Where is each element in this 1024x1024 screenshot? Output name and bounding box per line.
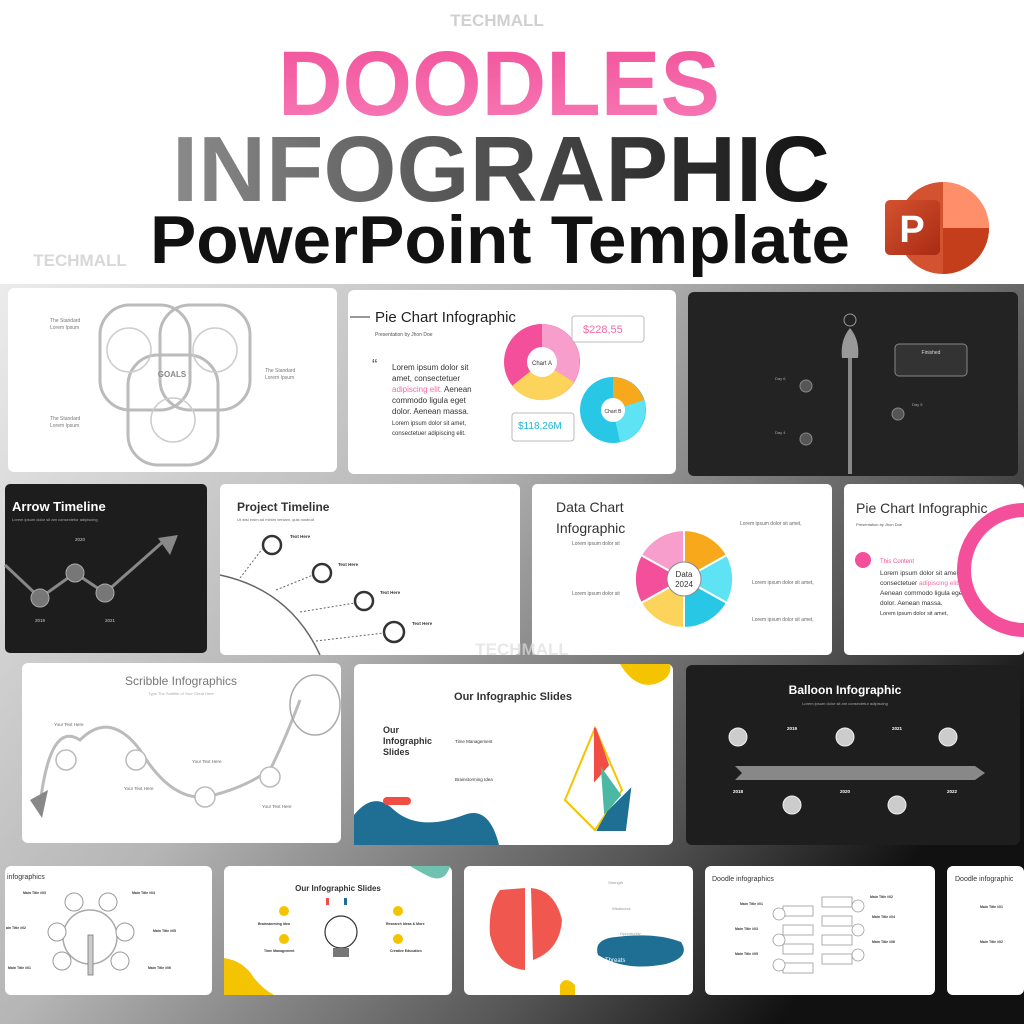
slide: doodle infographic partial: Main Title #01: [980, 905, 1003, 909]
slide: pie chart infographic: commodo ligula eget: [392, 396, 467, 405]
slide: doodle infographic partial: [947, 866, 1024, 995]
slide: pie chart infographic: [348, 290, 676, 474]
slide: doodle infographics arrows: Main Title #04: [872, 915, 895, 919]
slide: pie chart infographic: $228,55: [583, 324, 623, 336]
slide: balloon infographic dark: 2021: [892, 726, 903, 731]
slide: balloon infographic dark: Lorem ipsum dolor sit am consectetur adipiscing: [802, 701, 888, 706]
slide: data chart infographic: 2024: [675, 580, 693, 589]
slide: doodle infographics arrows: Main Title #03: [735, 927, 758, 931]
slide: lightbulb our infographic slides: Research Ideas & More: [386, 922, 425, 926]
slide: data chart infographic: Infographic: [556, 520, 625, 536]
slide: data chart infographic: [532, 484, 832, 655]
slide: pie chart infographic: dolor. Aenean massa.: [392, 407, 469, 416]
slide: lightbulb our infographic slides: Creative Education: [390, 949, 422, 953]
slide: pie chart infographic 2: consectetuer adipiscing elit.: [880, 580, 960, 587]
slide: doodle infographics arrows: Main Title #02: [870, 895, 893, 899]
slide: goals venn: Lorem Ipsum: [50, 325, 79, 331]
slide: rocket timeline dark: Day 5: [912, 402, 923, 407]
slide: pencil infographics: Main Title #01: [8, 966, 31, 970]
slide: arrow timeline dark: Lorem ipsum dolor sit am consectetur adipiscing: [12, 517, 98, 522]
slide: goals venn: Lorem Ipsum: [50, 423, 79, 429]
slide: swot red shapes: [464, 866, 693, 995]
slide: pie chart infographic 2: Aenean commodo ligula eget: [880, 590, 964, 597]
slide: data chart infographic: Lorem ipsum dolor sit amet,: [740, 521, 802, 527]
slide: arrow timeline dark: [5, 484, 207, 653]
slide: project timeline: Project Timeline: [237, 500, 330, 514]
slide: balloon infographic dark: 2022: [947, 789, 958, 794]
slide: pencil infographics: ain Title #02: [6, 926, 26, 930]
slide: pie chart infographic 2: Lorem ipsum dolor sit amet,: [880, 611, 948, 617]
slide: goals venn: The Standard: [50, 416, 81, 422]
slide: doodle infographics arrows: Main Title #05: [735, 952, 758, 956]
slide: swot red shapes: Threats: [605, 958, 625, 964]
slide: pie chart infographic: Chart A: [532, 361, 552, 367]
slide: doodle infographic partial: Main Title #02: [980, 940, 1003, 944]
slide: lightbulb our infographic slides: Our Infographic Slides: [295, 884, 381, 893]
slide: swot red shapes: Strength: [608, 880, 623, 885]
title: INFOGRAPHIC: INFOGRAPHIC: [172, 117, 830, 221]
slide: pie chart infographic 2: This Content: [880, 559, 914, 565]
slide: pie chart infographic: $118,26M: [518, 421, 562, 432]
slide: arrow timeline dark: 2019: [35, 618, 46, 623]
slide: pie chart infographic: “: [372, 357, 377, 374]
slide: goals venn: [8, 288, 337, 472]
slide: project timeline: Text Here: [290, 534, 311, 539]
watermark: left: TECHMALL: [33, 251, 127, 270]
slide: doodle infographics arrows: Main Title #06: [872, 940, 895, 944]
slide: pyramid our infographic slides: Time Management: [455, 739, 493, 744]
slide: goals venn: The Standard: [265, 368, 296, 374]
slide: rocket timeline dark: Day 6: [775, 376, 786, 381]
slide: goals venn: GOALS: [158, 370, 187, 379]
slide: project timeline: [220, 484, 520, 655]
slide: goals venn: Lorem Ipsum: [265, 375, 294, 381]
slide: balloon infographic dark: 2020: [840, 789, 851, 794]
slide: lightbulb our infographic slides: Time Management: [264, 949, 295, 953]
slide: pencil infographics: Main Title #03: [23, 891, 46, 895]
slide: rocket timeline dark: Day 4: [775, 430, 786, 435]
slide: project timeline: Text Here: [412, 621, 433, 626]
slide: pie chart infographic 2: dolor. Aenean massa.: [880, 600, 943, 607]
slide: data chart infographic: Lorem ipsum dolor sit: [572, 541, 620, 547]
slide: swot red shapes: Opportunity: [620, 931, 641, 936]
slide: rocket timeline dark: Finished: [922, 350, 941, 356]
slide: doodle infographic partial: Doodle infographic: [955, 876, 1014, 883]
slide: pie chart infographic 2: Pie Chart Infographic: [856, 500, 988, 516]
slide: project timeline: Text Here: [338, 562, 359, 567]
slide: pie chart infographic: Presentation by Jhon Doe: [375, 332, 433, 338]
slide: pyramid our infographic slides: Infographic: [383, 736, 432, 746]
slide: goals venn: The Standard: [50, 318, 81, 324]
slide: pie chart infographic: adipiscing elit. Aenean: [392, 385, 472, 394]
slide: scribble infographics: Scribble Infographics: [125, 674, 237, 688]
slide: pie chart infographic 2: [844, 484, 1024, 655]
slide: doodle infographics arrows: [705, 866, 935, 995]
slide: project timeline: Ut wisi enim ad minim veniam, quis nostrud: [237, 517, 314, 522]
slide: scribble infographics: Your Text Here: [192, 759, 222, 764]
slide: rocket timeline dark: [688, 292, 1018, 476]
slide: arrow timeline dark: Arrow Timeline: [12, 499, 106, 514]
slide: scribble infographics: Type The Subtitle of Your Great Here: [148, 691, 215, 696]
icon: powerpoint: [885, 182, 989, 274]
slide: pyramid our infographic slides: Slides: [383, 747, 410, 757]
slide: balloon infographic dark: 2018: [733, 789, 744, 794]
slide: data chart infographic: Data: [676, 570, 693, 579]
slide: pyramid our infographic slides: [354, 664, 673, 845]
slide: lightbulb our infographic slides: Brainstorming Idea: [258, 922, 290, 926]
slide: data chart infographic: Lorem ipsum dolor sit amet,: [752, 617, 814, 623]
slide: pyramid our infographic slides: Our Infographic Slides: [454, 691, 572, 703]
slide: data chart infographic: Lorem ipsum dolor sit: [572, 591, 620, 597]
slide: balloon infographic dark: Balloon Infographic: [789, 683, 902, 697]
slide: pie chart infographic: Lorem ipsum dolor sit amet,: [392, 421, 466, 427]
watermark: center: TECHMALL: [475, 640, 569, 659]
title: PowerPoint Template: PowerPoint Template: [150, 202, 850, 278]
slide: scribble infographics: Your Text Here: [124, 786, 154, 791]
slide: pyramid our infographic slides: Our: [383, 725, 399, 735]
slide: balloon infographic dark: [686, 665, 1020, 845]
slide: scribble infographics: [22, 663, 341, 843]
slide: scribble infographics: Your Text Here: [262, 804, 292, 809]
watermark: top: TECHMALL: [450, 11, 544, 30]
slide: project timeline: Text Here: [380, 590, 401, 595]
slide: pencil infographics: Main Title #04: [132, 891, 155, 895]
slide: pie chart infographic 2: Presentation by Jhon Doe: [856, 522, 903, 527]
slide: balloon infographic dark: 2019: [787, 726, 798, 731]
slide: pencil infographics: [5, 866, 212, 995]
slide: arrow timeline dark: 2021: [105, 618, 116, 623]
slide: pie chart infographic 2: Lorem ipsum dolor sit amet,: [880, 570, 960, 577]
slide: pencil infographics: Main Title #05: [153, 929, 176, 933]
slide: pie chart infographic: Chart B: [605, 409, 622, 415]
title: DOODLES: DOODLES: [278, 33, 720, 135]
slide: pie chart infographic: amet, consectetuer: [392, 374, 460, 383]
slide: arrow timeline dark: 2020: [75, 537, 86, 542]
slide: pie chart infographic: Lorem ipsum dolor sit: [392, 363, 469, 372]
slide: scribble infographics: Your Text Here: [54, 722, 84, 727]
slide: pencil infographics: infographics: [7, 874, 45, 881]
background: [0, 280, 1024, 1024]
slide: swot red shapes: Weakness: [612, 906, 631, 911]
slide: data chart infographic: Data Chart: [556, 499, 624, 515]
slide: pie chart infographic: consectetuer adipiscing elit.: [392, 431, 466, 437]
icon: powerpoint: P: [899, 209, 925, 251]
slide: pyramid our infographic slides: Brainstorming Idea: [455, 777, 493, 782]
slide: lightbulb our infographic slides: [224, 866, 452, 995]
slide: doodle infographics arrows: Doodle infographics: [712, 876, 774, 883]
slide: pencil infographics: Main Title #06: [148, 966, 171, 970]
slide: doodle infographics arrows: Main Title #01: [740, 902, 763, 906]
slide: data chart infographic: Lorem ipsum dolor sit amet,: [752, 580, 814, 586]
slide: pie chart infographic: Pie Chart Infographic: [375, 309, 516, 326]
